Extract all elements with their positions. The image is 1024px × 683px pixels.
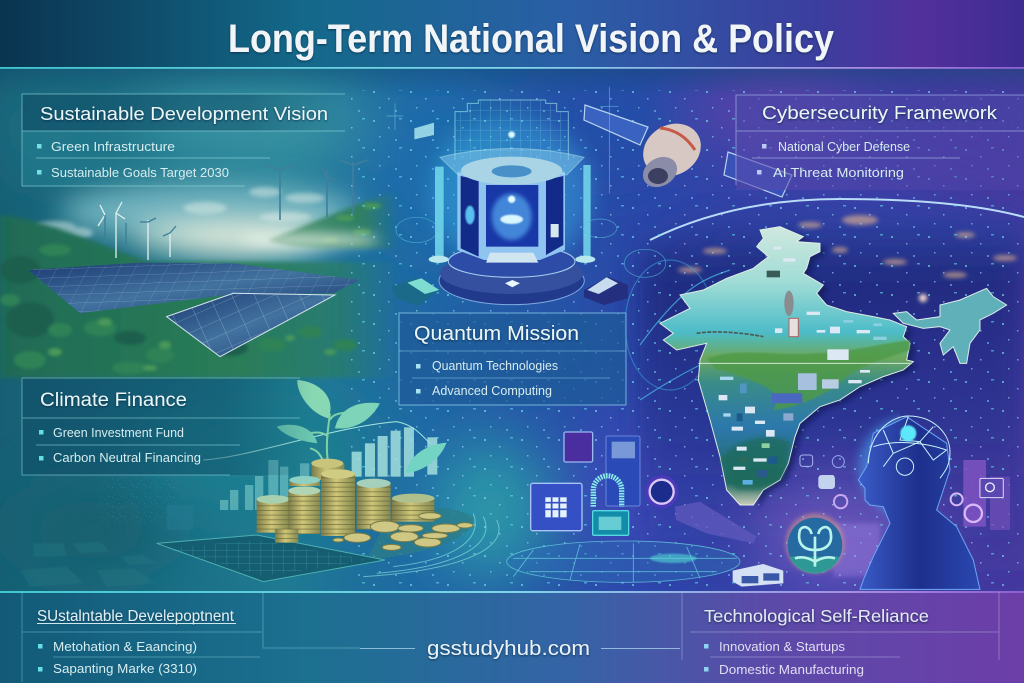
bullet list <box>37 140 229 180</box>
plant stem <box>307 412 353 463</box>
growth chart bars <box>203 422 437 510</box>
illustration: satellite <box>584 105 792 197</box>
stack 1 <box>257 495 289 533</box>
illustration: digital tech icons <box>507 432 880 587</box>
bullet list: Sustainable Goals Target 2030 <box>51 166 229 180</box>
stone path <box>20 542 157 587</box>
leaves <box>277 380 447 517</box>
solar wing right <box>724 152 792 197</box>
stack 3 <box>321 469 355 536</box>
rear panel <box>28 263 360 313</box>
wind turbines <box>98 160 368 260</box>
background skyline <box>100 477 180 523</box>
embedded panels <box>719 247 887 485</box>
satellite body <box>634 113 710 193</box>
arc of circuits <box>593 476 622 507</box>
pillars <box>429 165 595 263</box>
heading: Quantum Mission <box>414 323 579 345</box>
title: Long-Term National Vision & Policy <box>228 17 835 61</box>
panel: cybersecurity framework <box>736 95 1024 190</box>
bullet list <box>38 640 197 676</box>
bullet list: Quantum Technologies <box>432 359 558 373</box>
purple card <box>564 432 640 506</box>
bullet list: Green Investment Fund <box>53 426 184 440</box>
stack 4 <box>357 479 391 529</box>
front small stack <box>275 529 298 543</box>
mainland <box>660 227 913 505</box>
bullet list <box>416 359 558 398</box>
heading: Cybersecurity Framework <box>762 102 998 123</box>
solar wing left <box>584 105 648 145</box>
back stack <box>311 459 344 480</box>
bullet list: Advanced Computing <box>432 384 552 398</box>
tablet <box>157 535 385 582</box>
hologram grid <box>455 100 568 160</box>
ring badge <box>645 475 678 508</box>
bullet list: AI Threat Monitoring <box>773 166 904 180</box>
side consoles <box>392 277 628 306</box>
illustration: India map <box>660 227 918 508</box>
head glow <box>858 417 958 517</box>
panel: sustainable development vision <box>22 94 345 186</box>
map shadow <box>758 230 918 508</box>
bullet list <box>39 426 201 465</box>
chip card <box>531 483 582 531</box>
bullet list: Green Infrastructure <box>51 140 175 154</box>
orbit rings <box>396 217 666 277</box>
heading: SUstalntable Develepoptnent <box>37 608 235 625</box>
base platforms <box>439 245 584 305</box>
windows glyph <box>414 123 434 139</box>
mid small stack <box>392 494 435 522</box>
hills <box>0 215 400 378</box>
city lights <box>678 215 1017 278</box>
radar platform <box>507 541 740 583</box>
monument <box>789 318 798 337</box>
illustration: solar landscape <box>0 160 400 378</box>
floating widgets <box>800 455 1010 530</box>
illustration: climate finance coins and plant <box>20 380 499 587</box>
illustration: earth horizon <box>625 199 1024 590</box>
city skyline glow <box>833 523 880 577</box>
top ring <box>440 149 584 185</box>
illustration: AI human head <box>800 416 1010 589</box>
panel: sustainable development footer <box>22 592 360 682</box>
illustration: north-east islands <box>893 288 1007 363</box>
brain network <box>868 416 950 478</box>
silhouette <box>858 417 980 589</box>
factory block <box>733 564 783 587</box>
illustration: quantum computer <box>387 87 666 306</box>
industrial strip <box>675 502 757 543</box>
panel: climate finance <box>22 378 312 475</box>
panel: technological self-reliance <box>682 592 999 677</box>
heading: Technological Self-Reliance <box>704 606 929 626</box>
bullet list: National Cyber Defense <box>778 140 910 154</box>
sky and sunlight <box>60 182 360 255</box>
heading: Climate Finance <box>40 390 187 411</box>
bullet list <box>704 640 864 677</box>
satellite links <box>387 87 618 193</box>
panel: quantum mission <box>399 313 626 405</box>
title rules <box>0 35 1024 37</box>
clouds <box>35 187 325 239</box>
forest band <box>707 340 910 410</box>
coin stacks <box>257 459 435 543</box>
sun haze <box>240 234 380 246</box>
solar panels <box>28 263 360 357</box>
bullet list: Innovation & Startups <box>719 640 845 654</box>
front panel <box>167 293 335 357</box>
footer band <box>0 591 1024 683</box>
teal screen <box>593 511 629 535</box>
website address: gsstudyhub.com <box>427 637 590 660</box>
track rings <box>363 513 499 577</box>
rail line <box>697 332 763 337</box>
glow <box>432 117 592 270</box>
stack 2 <box>288 476 320 534</box>
bullet list: Carbon Neutral Financing <box>53 451 201 465</box>
bullet list <box>757 140 910 180</box>
computer body <box>457 172 565 263</box>
tech dots <box>345 90 1024 590</box>
emblem globe <box>786 513 844 574</box>
bullet list: Domestic Manufacturing <box>719 663 864 677</box>
heading: Sustainable Development Vision <box>40 103 328 124</box>
bullet list: Metohation & Eaancing) <box>53 640 197 654</box>
foliage <box>0 203 381 374</box>
bullet list: Sapanting Marke (3310) <box>53 662 197 676</box>
loose coins <box>333 513 473 550</box>
